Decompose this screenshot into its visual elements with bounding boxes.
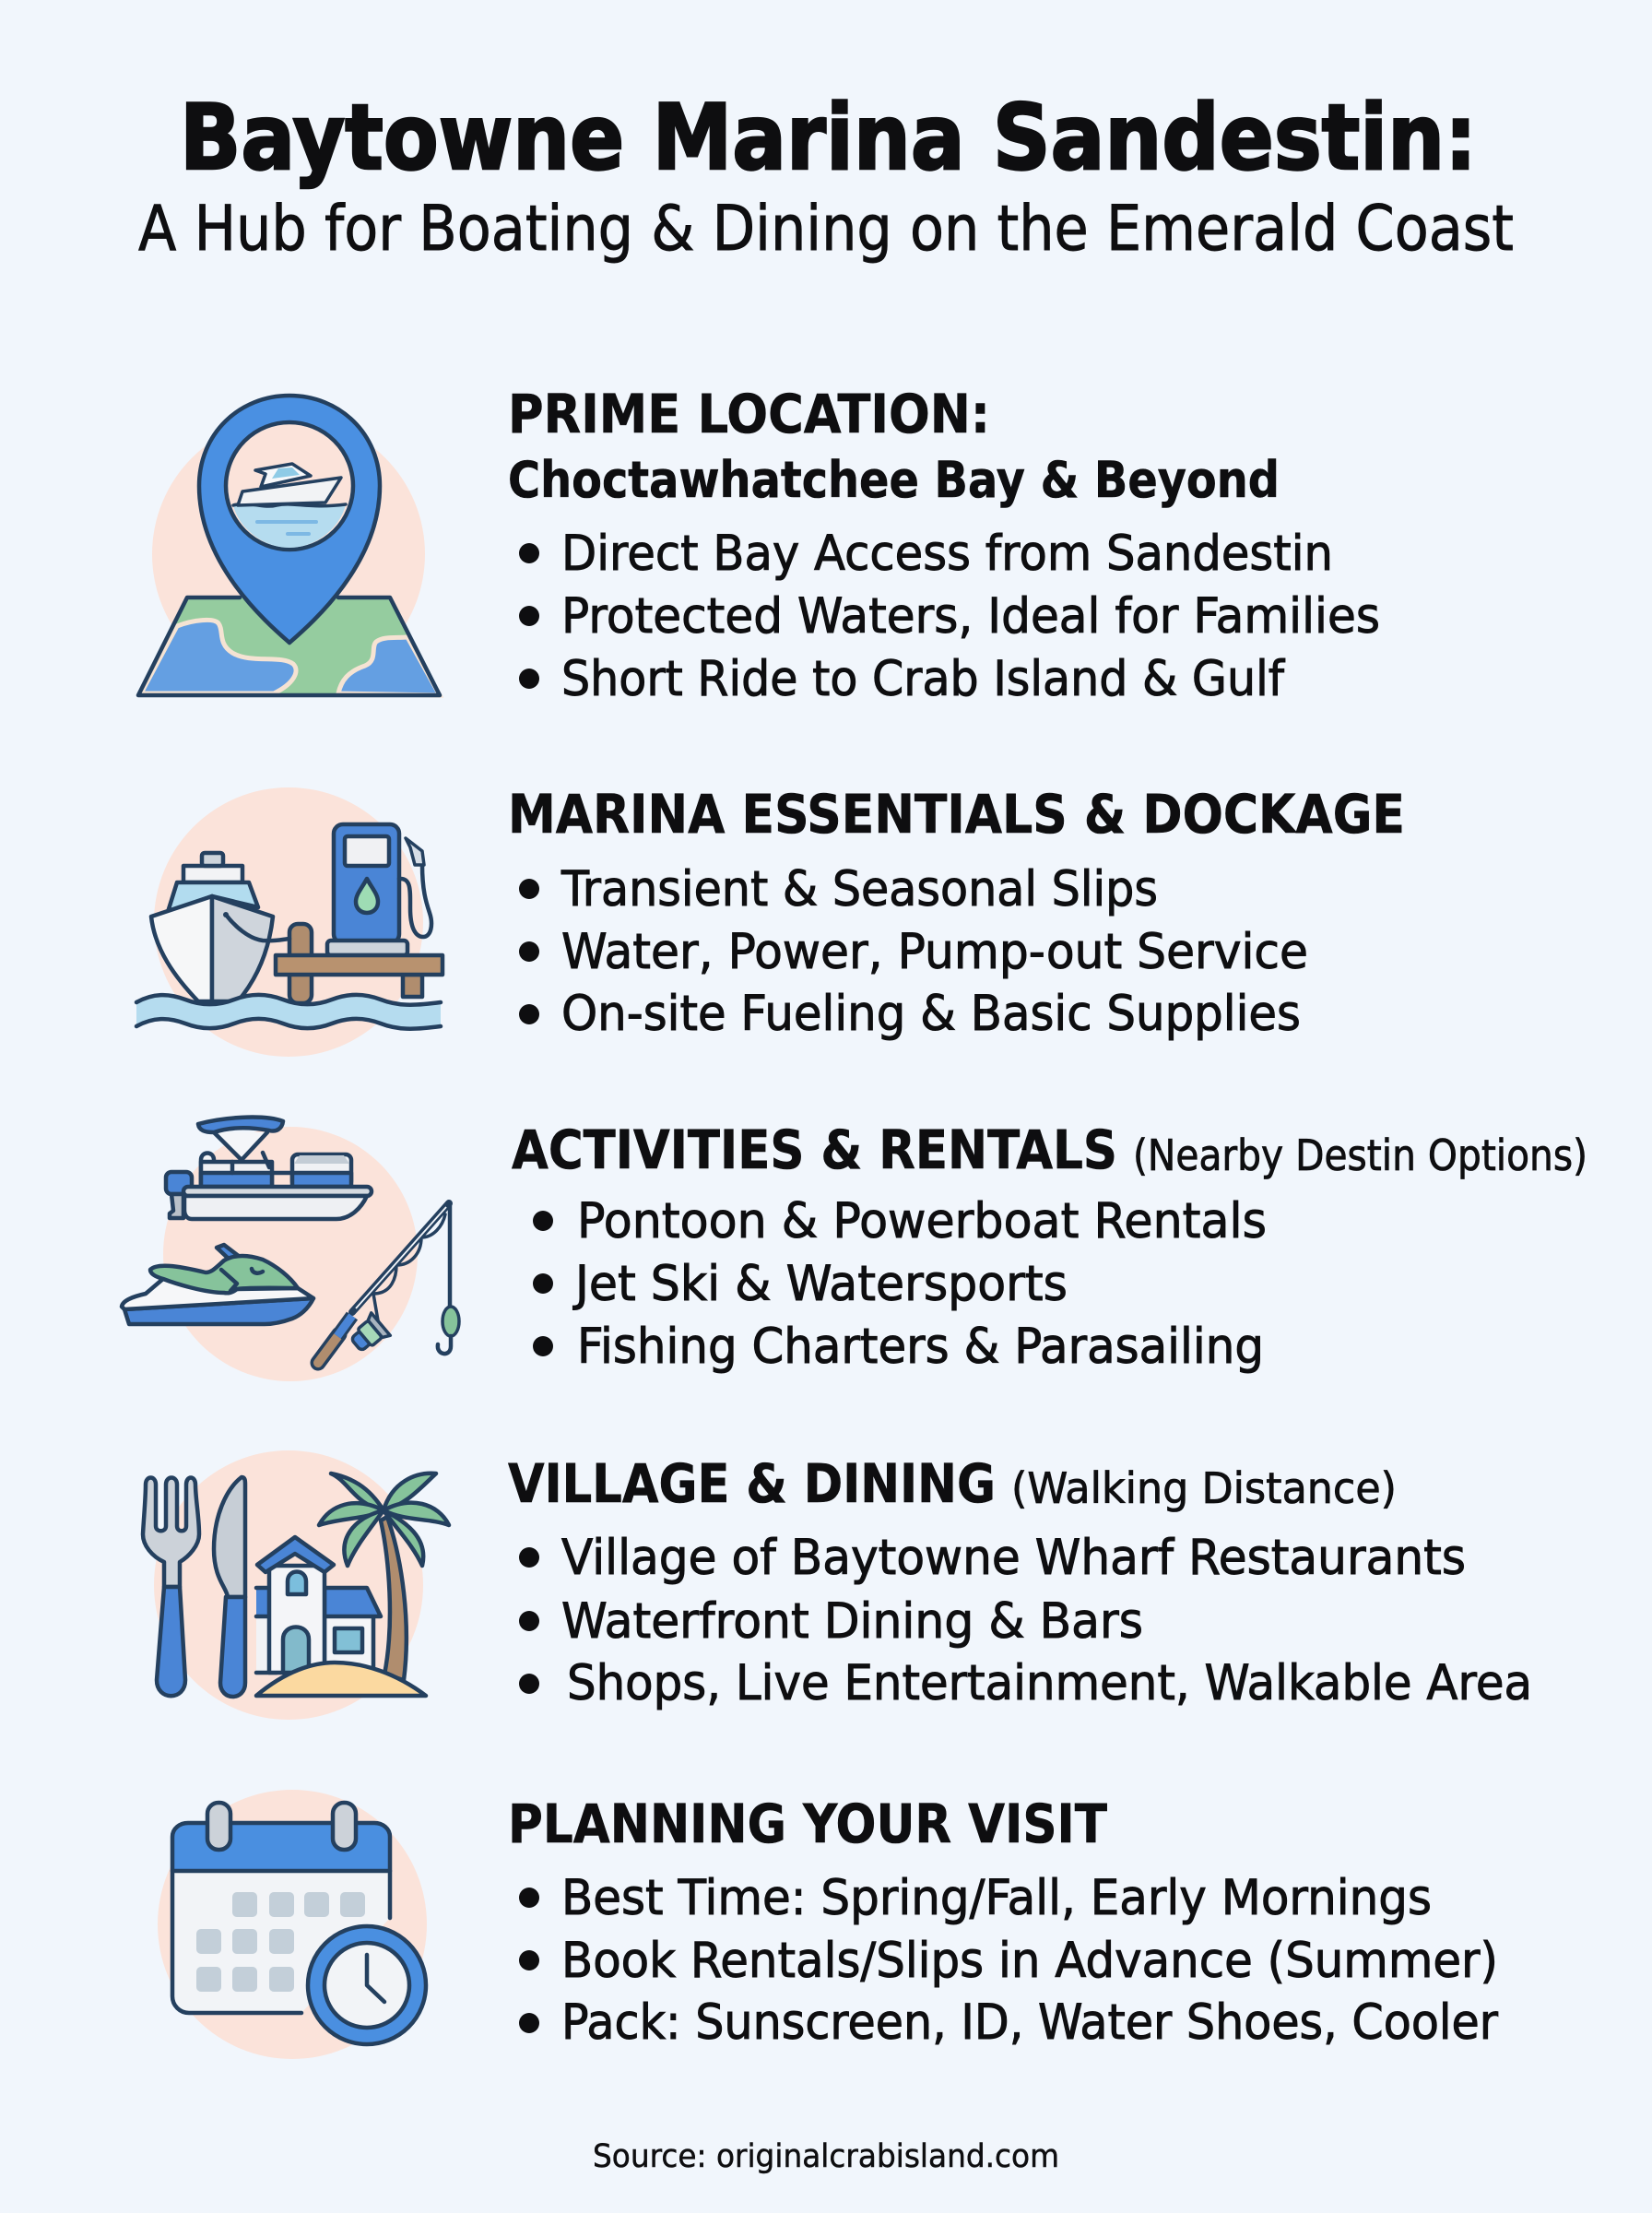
bullet list: Transient & Seasonal Slips <box>560 861 1158 917</box>
bullet list: Village of Baytowne Wharf Restaurants <box>561 1530 1466 1586</box>
bullet list <box>519 1870 1498 2051</box>
note: nearby options: (Nearby Destin Options) <box>1133 1130 1587 1180</box>
icon: boat, dock and fuel pump <box>136 787 442 1057</box>
bullet list <box>519 526 1380 707</box>
heading: marina essentials: MARINA ESSENTIALS & DOCKAGE <box>508 783 1405 846</box>
title: Baytowne Marina Sandestin: <box>180 86 1477 191</box>
heading: activities: ACTIVITIES & RENTALS <box>512 1118 1117 1181</box>
bullet list <box>519 1530 1532 1711</box>
panel: activities and rentals <box>512 1118 1587 1375</box>
panel: planning your visit <box>508 1793 1498 2051</box>
bullet list: Pontoon & Powerboat Rentals <box>577 1193 1267 1249</box>
icon: pontoon, jet ski and fishing rod <box>122 1118 459 1381</box>
panel: marina essentials <box>508 783 1405 1042</box>
bullet list <box>533 1193 1267 1375</box>
bullet list: On-site Fueling & Basic Supplies <box>561 986 1301 1042</box>
bullet list: Protected Waters, Ideal for Families <box>561 588 1380 645</box>
bullet list: Short Ride to Crab Island & Gulf <box>561 651 1285 707</box>
bullet list: Jet Ski & Watersports <box>572 1256 1068 1312</box>
bullet list: Book Rentals/Slips in Advance (Summer) <box>561 1933 1498 1989</box>
heading: prime location: PRIME LOCATION: <box>508 383 990 445</box>
panel: village and dining <box>508 1452 1532 1711</box>
source credit: Source: originalcrabisland.com <box>593 2138 1059 2175</box>
bullet list <box>519 861 1308 1042</box>
bullet list: Direct Bay Access from Sandestin <box>561 526 1333 582</box>
heading: village: VILLAGE & DINING <box>508 1452 996 1515</box>
bullet list: Shops, Live Entertainment, Walkable Area <box>567 1655 1532 1711</box>
note: walking distance: (Walking Distance) <box>1011 1463 1397 1513</box>
icon: calendar and clock <box>158 1790 427 2059</box>
bullet list: Fishing Charters & Parasailing <box>577 1319 1264 1375</box>
subtitle: A Hub for Boating & Dining on the Emerald Coast <box>138 193 1514 266</box>
heading: planning: PLANNING YOUR VISIT <box>508 1793 1107 1855</box>
bullet list: Waterfront Dining & Bars <box>561 1593 1143 1650</box>
bullet list: Pack: Sunscreen, ID, Water Shoes, Cooler <box>561 1994 1498 2051</box>
bullet list: Best Time: Spring/Fall, Early Mornings <box>561 1870 1432 1926</box>
subheading: Choctawhatchee Bay & Beyond <box>508 451 1280 509</box>
panel: prime location <box>508 383 1380 707</box>
icon: map pin with boat <box>138 396 440 695</box>
icon: cutlery, house and palm <box>143 1450 449 1720</box>
bullet list: Water, Power, Pump-out Service <box>561 924 1308 980</box>
